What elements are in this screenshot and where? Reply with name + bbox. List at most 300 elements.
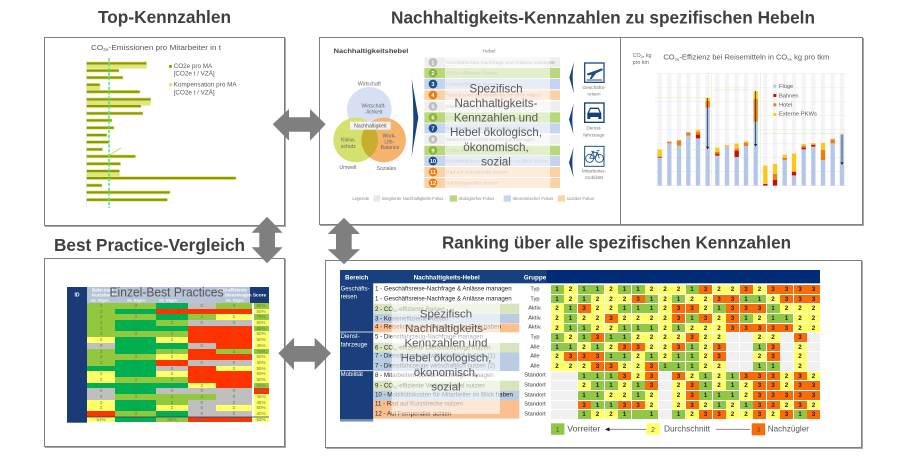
best practice score table: 4 <box>135 337 137 342</box>
lever rows <box>373 283 550 421</box>
best practice score table: 1 <box>200 371 203 376</box>
lever list <box>424 57 560 188</box>
ranking heat grid: 2 <box>663 324 667 332</box>
ranking heat grid: 3 <box>771 353 775 360</box>
ranking heat grid: 3 <box>812 296 815 303</box>
best practice score table: 4 <box>135 388 137 393</box>
best practice score table: 4 <box>135 371 137 376</box>
ranking heat grid: 1 <box>555 334 559 341</box>
panel: Top-Kennzahlen bar chart <box>44 37 285 226</box>
best practice score table: 1 <box>171 360 173 365</box>
stacked bar chart <box>655 73 847 186</box>
overlay text: Spezifisch Nachhaltigkeits-Kennzahlen: Hebel ökologisch, <box>450 126 542 139</box>
ranking heat grid: 2 <box>582 315 586 322</box>
ranking heat grid: 2 <box>690 296 694 303</box>
best practice score table: 4 <box>100 366 102 371</box>
best practice score table: 2 <box>233 314 235 319</box>
ranking heat grid: 3 <box>636 344 640 351</box>
best practice score table: 3 <box>135 314 137 319</box>
ranking heat grid: 1 <box>636 392 640 399</box>
ranking heat grid: 1 <box>582 334 586 341</box>
venn diagram: -lichkeit <box>365 109 383 115</box>
best practice score table: 1 <box>200 326 203 331</box>
ranking heat grid: 2 <box>677 402 680 408</box>
ranking heat grid: 2 <box>596 315 599 322</box>
ranking heat grid: 2 <box>596 411 599 418</box>
ranking heat grid: 1 <box>758 296 761 303</box>
ranking heat grid: 3 <box>690 382 694 389</box>
ranking heat grid: 1 <box>650 411 653 418</box>
best practice score table: 0 <box>233 388 235 393</box>
ranking heat grid: 1 <box>731 392 734 399</box>
ranking heat grid: 2 <box>596 296 599 303</box>
ranking heat grid <box>551 285 820 419</box>
white translucent overlay with text <box>392 303 500 414</box>
chart legend: Bahnen <box>779 93 799 99</box>
ranking heat grid: 2 <box>704 324 707 332</box>
best practice score table: 4 <box>171 314 173 319</box>
ranking heat grid: 1 <box>771 315 775 322</box>
best practice score table: 0 <box>200 360 203 365</box>
lever rows: 1 - Geschäftsreise-Nachfrage & Anlässe managen <box>375 286 512 293</box>
ranking heat grid: 2 <box>636 363 640 370</box>
ranking heat grid: 1 <box>623 353 626 360</box>
category labels: fahrzeuge <box>583 132 605 138</box>
ranking heat grid: 2 <box>636 373 640 380</box>
best practice score table: 1 <box>233 343 235 348</box>
ranking heat grid: 2 <box>785 373 788 380</box>
ranking heat grid: 3 <box>717 344 721 351</box>
best practice score table: 45% <box>256 400 266 405</box>
ranking heat grid: 3 <box>798 373 802 380</box>
lever rows: -effiziente Dienstfahrzeuge nutzen <box>397 344 491 351</box>
lever list: 11 <box>430 170 436 176</box>
ranking heat grid: 2 <box>650 344 653 351</box>
ranking heat grid: 1 <box>555 296 559 303</box>
best practice score table: 4 <box>135 309 137 314</box>
best practice score table: 4 <box>100 383 102 388</box>
best practice score table: 0 <box>233 394 235 399</box>
ranking heat grid: 2 <box>555 353 559 360</box>
ranking heat grid: 2 <box>717 382 721 389</box>
ranking heat grid: 2 <box>812 402 815 408</box>
best practice score table: 25% <box>256 388 266 393</box>
best practice score table: 50% <box>256 405 266 410</box>
lever rows: 3 - Kosteneffiziente Reisen <box>375 316 449 323</box>
best practice score table: 3 <box>100 354 102 359</box>
overlay text: Spezifisch Nachhaltigkeits-Kennzahlen: Nachhaltigkeits- <box>455 97 538 110</box>
best practice score table <box>87 303 269 422</box>
ranking heat grid: 3 <box>623 344 626 351</box>
chart legend <box>773 84 817 118</box>
ranking heat grid: 1 <box>771 363 775 370</box>
table header and ID column: Dienstwagen <box>225 292 252 298</box>
venn diagram: Umwelt <box>339 165 357 171</box>
best practice score table: 3 <box>100 360 102 365</box>
ranking heat grid: 1 <box>650 324 653 332</box>
table header and ID column: ws. tragen <box>90 298 109 302</box>
best practice score table: 50% <box>256 309 266 314</box>
ranking heat grid: 3 <box>704 286 707 293</box>
ranking heat grid: 2 <box>582 382 586 389</box>
ranking heat grid: 3 <box>812 286 815 293</box>
ranking heat grid: 1 <box>650 296 653 303</box>
lever list: Dienstfahrzeug-Nachfrage managen <box>446 104 527 110</box>
ranking heat grid: 3 <box>569 353 572 360</box>
ranking heat grid: 3 <box>798 382 802 389</box>
ranking heat grid: 1 <box>704 382 707 389</box>
lever list: Geschäftsreise-Nachfrage und Anlässe managen <box>446 60 555 66</box>
lever rows: -effiziente Reisen <box>397 306 445 313</box>
table header <box>340 270 820 283</box>
best practice score table: 4 <box>135 348 137 354</box>
ranking heat grid: 3 <box>731 324 734 332</box>
best practice score table: 1 <box>233 383 235 388</box>
ranking heat grid: 3 <box>731 296 734 303</box>
ranking heat grid: 3 <box>758 402 761 408</box>
group column: Typ <box>530 287 540 293</box>
chart legend: Externe PKWs <box>779 112 817 118</box>
area column: Geschäfts- <box>341 286 370 292</box>
best practice score table: 65% <box>256 326 266 331</box>
ranking heat grid: 1 <box>731 373 734 380</box>
ranking heat grid: 1 <box>690 315 694 322</box>
best practice score table: 2 <box>171 371 173 376</box>
ranking heat grid: 3 <box>609 315 613 322</box>
best practice score table: 50% <box>256 354 266 359</box>
category labels: Mitarbeiter- <box>582 168 607 174</box>
ranking heat grid: 1 <box>596 392 599 399</box>
ranking heat grid: 1 <box>650 305 653 312</box>
ranking heat grid: 2 <box>731 411 734 418</box>
venn diagram <box>333 82 406 172</box>
venn diagram: schutz <box>341 144 356 150</box>
lever list: 5 <box>431 104 435 110</box>
lever rows: 2e <box>393 347 397 351</box>
ranking heat grid: 1 <box>636 324 640 332</box>
best practice score table: 4 <box>135 360 137 365</box>
ranking heat grid: 2 <box>704 344 707 351</box>
table header and ID column: ws. tragen <box>225 298 244 302</box>
ranking heat grid: 3 <box>798 296 802 303</box>
chart legend: [CO2e t / VZÄ] <box>174 70 215 78</box>
lever rows: 4 - Reisekosten der Mitarbeiter im Blick haben <box>375 323 501 330</box>
lever list: Kosteneffiziente Reisen <box>446 82 499 88</box>
ranking heat grid: 1 <box>704 392 707 399</box>
chart title: -Emissionen pro Mitarbeiter in t <box>109 43 221 52</box>
group column: Alle <box>530 345 540 351</box>
lever list: 1 <box>431 60 435 66</box>
best practice score table: 40% <box>256 360 266 365</box>
ranking heat grid: 1 <box>582 411 586 418</box>
best practice score table: 50% <box>256 371 266 376</box>
ranking heat grid: 3 <box>650 382 653 389</box>
best practice score table: 55% <box>256 366 266 371</box>
ranking heat grid: 3 <box>582 353 586 360</box>
ranking heat grid: 3 <box>731 315 734 322</box>
best practice score table: 2 <box>171 354 173 359</box>
ranking heat grid: 3 <box>744 373 748 380</box>
ranking heat grid: 1 <box>609 373 613 380</box>
ranking heat grid: 3 <box>690 402 694 408</box>
ranking heat grid: 3 <box>798 392 802 399</box>
lever rows: 5 - Dienstfahrzeug-Nachfrage managen <box>375 333 484 340</box>
best practice score table: 65% <box>167 417 177 422</box>
best practice score table: 3 <box>135 354 137 359</box>
title: Best Practice-Vergleich: Best Practice-Vergleich <box>54 235 245 255</box>
lever rows: 1 - Geschäftsreise-Nachfrage & Anlässe managen <box>375 296 512 303</box>
icon: airplane <box>585 63 604 82</box>
chart legend <box>169 63 237 96</box>
group column: Typ <box>530 335 540 341</box>
ranking heat grid: 2 <box>690 324 694 332</box>
best practice score table: 75% <box>256 314 266 319</box>
ranking heat grid: 3 <box>771 373 775 380</box>
area column: fahrzeuge <box>341 342 368 348</box>
best practice score table: 50% <box>256 377 266 382</box>
ranking heat grid: 1 <box>771 305 775 312</box>
lever list: 8 <box>431 137 435 143</box>
lever rows: 2e <box>393 309 397 313</box>
ranking heat grid: 3 <box>758 305 761 312</box>
venn diagram: Life- <box>384 139 395 145</box>
best practice score table: 0 <box>171 388 173 393</box>
best practice score table: 52% <box>256 417 266 422</box>
area column: Dienst- <box>341 334 360 340</box>
best practice score table: 3 <box>171 348 173 354</box>
legend: ökonomischer Fokus <box>513 196 553 201</box>
best practice score table: 3 <box>171 394 173 399</box>
white translucent overlay with text: Nachhaltigkeits- <box>405 323 487 335</box>
ranking heat grid: 2 <box>623 392 626 399</box>
best practice score table: 4 <box>135 343 137 348</box>
ranking heat grid: 3 <box>704 411 707 418</box>
table header and ID column: Bahn statt <box>92 288 114 292</box>
ranking heat grid: 3 <box>596 334 599 341</box>
best practice score table: 3 <box>100 348 102 354</box>
lever list: 4 <box>431 93 435 99</box>
best practice score table: 0 <box>100 394 102 399</box>
lever list: 2 <box>431 71 435 77</box>
ranking heat grid: 3 <box>771 392 775 399</box>
chart legend: Flüge <box>779 84 793 90</box>
category labels: Geschäfts- <box>582 85 606 91</box>
ranking heat grid: 1 <box>596 382 599 389</box>
best practice score table: 3 <box>200 394 203 399</box>
group column: Standort <box>524 402 546 408</box>
ranking heat grid: 2 <box>744 392 748 399</box>
best practice score table: 4 <box>135 405 137 410</box>
chart title: kg pro tkm <box>792 54 830 61</box>
venn diagram: Nachhaltigkeit <box>354 123 387 129</box>
ranking heat grid: 3 <box>650 373 653 380</box>
best practice score table: 20% <box>197 417 206 422</box>
best practice score table: 54% <box>97 417 106 422</box>
ranking heat grid: 3 <box>690 334 694 341</box>
ranking heat grid: 2 <box>596 305 599 312</box>
group column: Aktiv. <box>528 315 542 321</box>
area column <box>340 283 373 421</box>
chart legend: [CO2e t / VZÄ] <box>174 88 215 96</box>
ranking heat grid: 3 <box>677 344 680 351</box>
ranking heat grid: 1 <box>582 373 586 380</box>
legend: ökologischer Fokus <box>458 196 494 201</box>
ranking heat grid: 1 <box>582 392 586 399</box>
ranking heat grid: 3 <box>785 286 788 293</box>
best practice score table: 45% <box>256 394 266 399</box>
best practice score table: 70% <box>256 348 266 354</box>
ranking heat grid: 2 <box>569 286 572 293</box>
best practice score table: 0 <box>200 405 203 410</box>
ranking heat grid: 3 <box>744 305 748 312</box>
ranking heat grid: 1 <box>677 353 680 360</box>
legend: Legende <box>352 196 370 201</box>
best practice score table: 2 <box>100 371 102 376</box>
best practice score table: 0 <box>100 343 102 348</box>
ranking heat grid: 2 <box>677 286 680 293</box>
best practice score table: 2 <box>100 400 102 405</box>
ranking heat grid: 3 <box>798 402 802 408</box>
lever list: 9 <box>431 148 435 154</box>
best practice score table: 1 <box>233 309 235 314</box>
ranking heat grid: 2 <box>798 363 802 370</box>
venn diagram: Klima- <box>341 138 356 144</box>
lever list: Reisekosten der Mitarbeiter im Blick haben <box>446 93 541 99</box>
ranking heat grid: 3 <box>636 296 640 303</box>
ranking heat grid: 3 <box>744 286 748 293</box>
ranking heat grid: 1 <box>717 402 721 408</box>
title: Top-Kennzahlen: Top-Kennzahlen <box>98 7 231 27</box>
ranking heat grid: 3 <box>731 305 734 312</box>
ranking heat grid: 2 <box>663 286 667 293</box>
best practice score table: 3 <box>171 320 173 325</box>
lever rows: 9 - CO <box>375 383 393 390</box>
ranking heat grid: 3 <box>798 334 802 341</box>
best practice score table: 72% <box>131 417 140 422</box>
best practice score table: 2 <box>233 366 235 371</box>
ranking heat grid: 2 <box>785 402 788 408</box>
ranking heat grid: 1 <box>623 286 626 293</box>
ranking heat grid: 2 <box>609 305 613 312</box>
ranking heat grid: 3 <box>677 305 680 312</box>
ranking heat grid: 1 <box>636 286 640 293</box>
chart title: 2e <box>103 47 109 52</box>
ranking heat grid: 2 <box>798 324 802 332</box>
best practice score table: 0 <box>233 411 235 416</box>
best practice score table: 3 <box>200 314 203 319</box>
ranking heat grid: 3 <box>785 296 788 303</box>
lever list: Dienstfahrzeuge wirtschaftlich nutzen <box>446 126 529 132</box>
ranking heat grid: 3 <box>771 382 775 389</box>
ranking heat grid: 2 <box>771 334 775 341</box>
best practice score table: 3 <box>135 411 137 416</box>
table header and ID column <box>67 287 269 423</box>
group column: Alle <box>530 354 540 360</box>
lever rows: 11 - Rad auf Kurzstrecke nutzen <box>375 401 463 408</box>
ranking heat grid: 2 <box>785 382 788 389</box>
ranking heat grid: 3 <box>717 411 721 418</box>
ranking legend: 2 <box>651 427 655 434</box>
ranking heat grid: 3 <box>758 373 761 380</box>
best practice score table: 2 <box>233 405 235 410</box>
chart title: CO <box>663 54 674 61</box>
lever rows: 2e <box>393 386 397 390</box>
title: Nachhaltigkeits-Kennzahlen zu spezifischen Hebeln: Nachhaltigkeits-Kennzahlen zu spezifischen Hebeln <box>391 8 815 28</box>
ranking heat grid: 1 <box>582 296 586 303</box>
lever list: Rad auf Kurzstrecke nutzen <box>446 170 508 176</box>
overlay text: Spezifisch Nachhaltigkeits-Kennzahlen: Spezifisch <box>469 83 523 96</box>
best practice score table: 4 <box>135 366 137 371</box>
ranking heat grid: 2 <box>677 334 680 341</box>
best practice score table: 1 <box>200 354 203 359</box>
ranking heat grid: 2 <box>731 402 734 408</box>
ranking heat grid: 1 <box>609 334 613 341</box>
ranking heat grid: 1 <box>582 286 586 293</box>
ranking heat grid: 3 <box>785 411 788 418</box>
ranking heat grid: 3 <box>771 344 775 351</box>
best practice score table: 1 <box>200 337 203 342</box>
best practice score table: 3 <box>100 326 102 331</box>
table header and ID column: ws. tragen <box>158 298 177 302</box>
ranking heat grid: 3 <box>771 286 775 293</box>
ranking heat grid: 2 <box>758 353 761 360</box>
ranking heat grid: 1 <box>650 353 653 360</box>
ranking heat grid: 3 <box>812 392 815 399</box>
ranking heat grid: 2 <box>812 324 815 332</box>
ranking heat grid: 2 <box>704 334 707 341</box>
axis unit label <box>633 53 652 66</box>
best practice score table: 2 <box>100 377 102 382</box>
ranking heat grid: 1 <box>677 296 680 303</box>
ranking heat grid: 1 <box>569 344 572 351</box>
ranking heat grid: 2 <box>798 344 802 351</box>
best practice score table: 0 <box>200 400 203 405</box>
horizontal bar chart <box>86 58 236 208</box>
lever list: 12 <box>430 181 436 187</box>
best practice score table: 0 <box>100 388 102 393</box>
table header and ID column: CO2-effiziente <box>218 288 247 292</box>
ranking heat grid: 2 <box>690 373 694 380</box>
ranking heat grid: 2 <box>758 334 761 341</box>
ranking heat grid: 1 <box>785 315 788 322</box>
best practice score table: 40% <box>256 411 266 416</box>
ranking legend: 3 <box>756 427 760 434</box>
ranking heat grid: 1 <box>717 392 721 399</box>
ranking heat grid: 3 <box>758 392 761 399</box>
ranking heat grid: 1 <box>744 402 748 408</box>
ranking heat grid: 3 <box>758 382 761 389</box>
ranking heat grid: 1 <box>596 402 599 408</box>
best practice score table: 1 <box>200 331 203 336</box>
best practice score table: 3 <box>100 303 102 308</box>
ranking heat grid: 2 <box>758 315 761 322</box>
ranking heat grid: 1 <box>609 382 613 389</box>
best practice score table: 27% <box>229 417 238 422</box>
area column: reisen <box>341 295 357 301</box>
ranking legend: Nachzügler <box>768 425 809 434</box>
ranking heat grid: 1 <box>569 305 572 312</box>
ranking heat grid: 3 <box>785 324 788 332</box>
panel heading: Nachhaltigkeitshebel <box>334 48 408 55</box>
best practice score table: 1 <box>100 411 102 416</box>
ranking heat grid: 1 <box>731 382 734 389</box>
ranking heat grid: 2 <box>650 286 653 293</box>
ranking heat grid: 3 <box>771 324 775 332</box>
ranking heat grid: 1 <box>555 344 559 351</box>
ranking heat grid: 2 <box>717 286 721 293</box>
best practice score table: 2 <box>200 383 203 388</box>
group column: Typ <box>530 297 540 303</box>
